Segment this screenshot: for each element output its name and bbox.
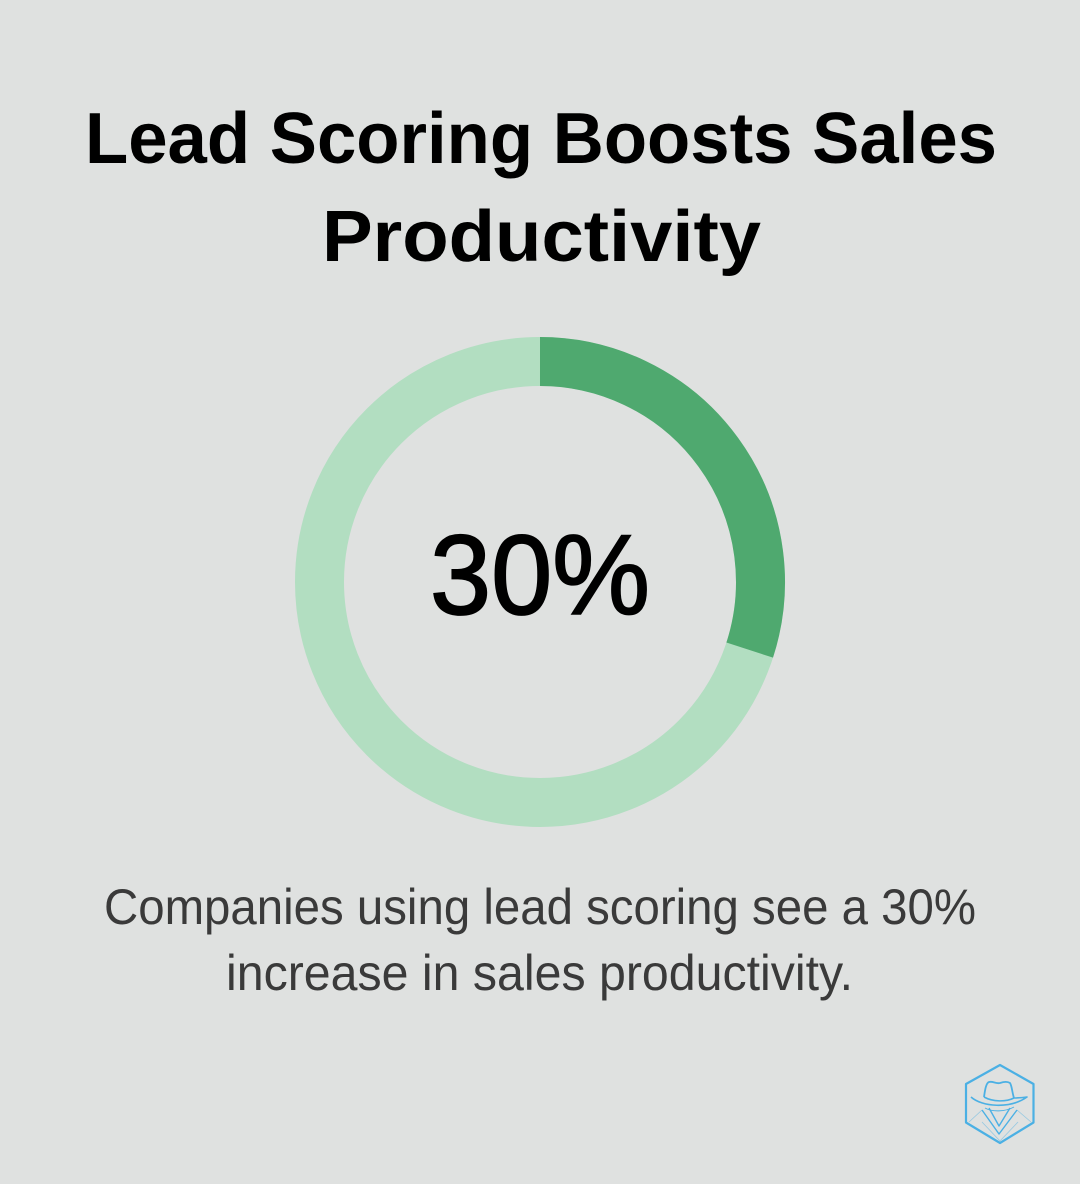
description text: increase in sales productivity.: [226, 945, 853, 1001]
title: Lead Scoring Boosts Sales: [85, 99, 997, 179]
title: [85, 99, 997, 277]
description text: [104, 879, 976, 1001]
donut value: 30%: [430, 512, 650, 638]
icon: hexagon spy logo: [966, 1065, 1034, 1143]
title: Productivity: [322, 197, 761, 277]
donut chart: 30 percent: [320, 362, 760, 802]
description text: Companies using lead scoring see a 30%: [104, 879, 976, 935]
